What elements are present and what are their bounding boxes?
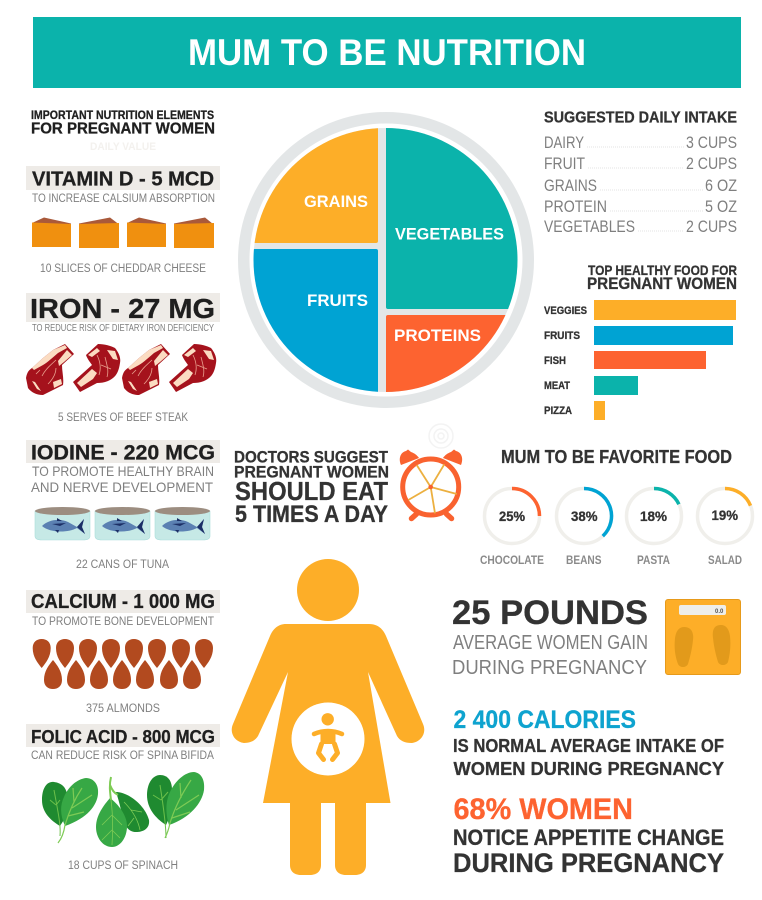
icon: almonds	[33, 639, 213, 689]
panel: doctors suggest: SHOULD EAT	[235, 476, 388, 506]
panel: plate chart: PROTEINS	[394, 326, 481, 345]
panel: top healthy food bar chart: PIZZA	[544, 405, 572, 417]
icon: bathroom scale	[666, 600, 740, 674]
icon: pregnant woman figure	[232, 559, 424, 875]
panel: iodine: IODINE - 220 MCG	[31, 440, 215, 464]
panel: 2400 calories	[453, 706, 724, 779]
panel: doctors suggest: 5 TIMES A DAY	[235, 501, 388, 528]
panel: nutrition elements heading: IMPORTANT NUTRITION ELEMENTS	[31, 108, 214, 122]
panel: top healthy food bar chart: FISH	[544, 355, 566, 367]
panel: iodine: TO PROMOTE HEALTHY BRAIN	[32, 463, 214, 479]
segment: proteins	[386, 315, 506, 392]
donut: chocolate 25%: CHOCOLATE	[480, 553, 544, 567]
panel: suggested daily intake: DAIRY	[544, 133, 584, 152]
panel: suggested daily intake: 6 OZ	[705, 176, 737, 195]
donut: beans 38%: 38%	[571, 508, 598, 524]
panel: 2400 calories: 2 400 CALORIES	[454, 706, 636, 734]
icon: spinach leaves	[42, 772, 204, 847]
panel: iodine: 22 CANS OF TUNA	[76, 559, 169, 571]
icon: bathroom scale: 0.0	[715, 609, 724, 615]
panel: suggested daily intake: FRUIT	[544, 154, 585, 173]
panel: iron	[26, 293, 220, 424]
donut: pasta 18%: PASTA	[637, 553, 670, 567]
panel: 2400 calories: IS NORMAL AVERAGE INTAKE OF	[453, 736, 724, 756]
panel: nutrition elements heading: FOR PREGNANT WOMEN	[31, 120, 215, 138]
panel: vitamin D: VITAMIN D - 5 MCD	[32, 168, 214, 190]
panel: 68% women: NOTICE APPETITE CHANGE	[453, 825, 724, 850]
donut: salad 19%: SALAD	[708, 553, 742, 567]
panel: 25 pounds: AVERAGE WOMEN GAIN	[453, 632, 648, 654]
title: MUM TO BE NUTRITION	[188, 32, 586, 73]
icon: tuna cans	[35, 507, 210, 540]
panel: suggested daily intake: PROTEIN	[544, 197, 607, 216]
panel: calcium: TO PROMOTE BONE DEVELOPMENT	[32, 616, 214, 628]
panel: plate chart: GRAINS	[304, 192, 368, 211]
segment: grains	[250, 125, 378, 243]
panel: vitamin D: TO INCREASE CALSIUM ABSORPTION	[32, 191, 215, 205]
panel: suggested daily intake: VEGETABLES	[544, 217, 635, 236]
donut: pasta 18%: 18%	[640, 508, 668, 524]
title banner	[33, 17, 741, 88]
panel: plate chart: VEGETABLES	[395, 224, 504, 244]
segment: fruits	[250, 249, 378, 397]
panel: folic acid: FOLIC ACID - 800 MCG	[31, 726, 215, 747]
panel: top healthy food bar chart: PREGNANT WOMEN	[587, 274, 737, 293]
panel: top healthy food bar chart	[544, 262, 737, 420]
donut: chocolate 25%: 25%	[499, 508, 526, 524]
panel: calcium: 375 ALMONDS	[86, 703, 160, 715]
panel: nutrition elements heading: DAILY VALUE	[90, 141, 156, 153]
icon: baby	[314, 713, 342, 760]
donut: beans 38%: BEANS	[566, 553, 602, 567]
panel: suggested daily intake: GRAINS	[544, 176, 597, 195]
icon: alarm clock	[400, 450, 462, 518]
panel: iron: 5 SERVES OF BEEF STEAK	[58, 412, 188, 424]
donut: pasta 18%	[637, 488, 679, 567]
panel: iodine	[26, 440, 220, 571]
panel: plate chart	[238, 112, 534, 408]
panel: 25 pounds: 25 POUNDS	[452, 594, 648, 632]
panel: plate chart: FRUITS	[307, 291, 368, 310]
panel: calcium	[26, 590, 220, 715]
panel: iron: IRON - 27 MG	[30, 293, 215, 324]
panel: top healthy food bar chart: FRUITS	[544, 330, 580, 342]
panel: doctors suggest: DOCTORS SUGGEST	[234, 448, 389, 466]
icon: cheese slices	[32, 218, 214, 248]
panel: suggested daily intake: 2 CUPS	[686, 217, 737, 236]
panel: nutrition elements heading	[31, 108, 215, 153]
panel: doctors suggest	[234, 448, 462, 528]
donut: beans 38%	[566, 488, 612, 567]
segment: vegetables	[386, 125, 522, 309]
panel: iron: TO REDUCE RISK OF DIETARY IRON DEFICIENCY	[32, 323, 214, 334]
panel: suggested daily intake	[544, 110, 737, 236]
panel: 25 pounds: DURING PREGNANCY	[452, 657, 647, 679]
panel: suggested daily intake: 3 CUPS	[686, 133, 737, 152]
panel: 68% women: DURING PREGNANCY	[453, 848, 724, 878]
panel: 68% women: 68% WOMEN	[454, 793, 633, 826]
panel: suggested daily intake: 2 CUPS	[686, 154, 737, 173]
panel: favorite food donuts: MUM TO BE FAVORITE FOOD	[501, 446, 732, 467]
panel: calcium: CALCIUM - 1 000 MG	[31, 591, 215, 613]
panel: 25 pounds	[452, 594, 740, 679]
panel: suggested daily intake: SUGGESTED DAILY INTAKE	[544, 110, 737, 126]
panel: top healthy food bar chart: VEGGIES	[544, 305, 587, 317]
panel: top healthy food bar chart: TOP HEALTHY FOOD FOR	[588, 262, 737, 278]
panel: 68% women	[453, 793, 724, 878]
panel: vitamin D: 10 SLICES OF CHEDDAR CHEESE	[40, 263, 206, 275]
panel: folic acid	[26, 724, 220, 872]
donut: chocolate 25%	[480, 488, 544, 567]
donut: salad 19%: 19%	[712, 507, 739, 523]
panel: top healthy food bar chart: MEAT	[544, 380, 570, 392]
panel: 2400 calories: WOMEN DURING PREGNANCY	[454, 759, 724, 779]
panel: suggested daily intake: 5 OZ	[705, 197, 737, 216]
panel: folic acid: 18 CUPS OF SPINACH	[68, 860, 178, 872]
donut: salad 19%	[708, 488, 750, 567]
panel: vitamin D	[26, 166, 220, 275]
icon: beef steaks	[26, 344, 216, 395]
panel: favorite food donuts	[480, 446, 752, 567]
panel: folic acid: CAN REDUCE RISK OF SPINA BIFIDA	[31, 750, 214, 762]
panel: doctors suggest: PREGNANT WOMEN	[234, 462, 389, 482]
panel: iodine: AND NERVE DEVELOPMENT	[31, 479, 213, 495]
